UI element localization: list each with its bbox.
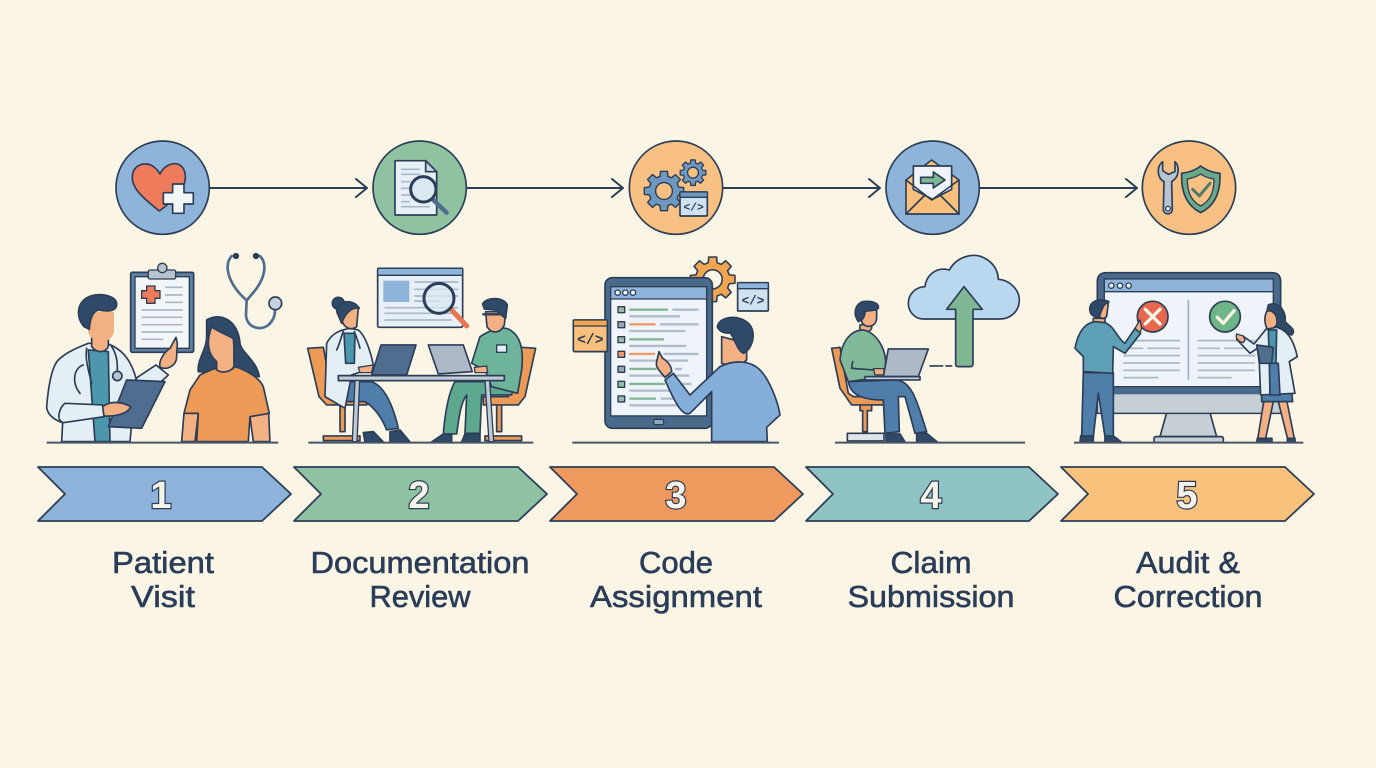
label: Patient Visit: Patient (112, 545, 214, 580)
icon: wrench and shield (1142, 141, 1236, 234)
icon: gears and code window: </> (683, 202, 704, 214)
arrow: step 4 to step 5 (979, 179, 1137, 197)
seated person (832, 301, 937, 442)
chevron 2: 2 (408, 475, 430, 517)
chevron 3: 3 (665, 475, 687, 517)
patient (182, 317, 270, 442)
label: Audit & Correction: Correction (1114, 579, 1262, 614)
chevron 2 (294, 467, 547, 521)
label: Code Assignment: Assignment (590, 579, 762, 614)
cloud (908, 255, 1019, 319)
illustration: two reviewers at a table (308, 268, 536, 443)
label: Documentation Review: Review (370, 579, 471, 614)
chevron 4 (806, 467, 1058, 521)
monitor (1097, 273, 1281, 443)
woman auditor (1236, 304, 1297, 442)
label: Code Assignment: Code (639, 545, 713, 580)
chevron 1: 1 (150, 475, 172, 517)
ground line (308, 440, 533, 446)
label: Documentation Review: Documentation (310, 545, 530, 580)
coder (656, 317, 780, 442)
panel: step 3 code assignment (550, 141, 803, 614)
panel: step 2 documentation review (294, 141, 547, 614)
ground line (1074, 440, 1303, 446)
chevron 5: 5 (1176, 475, 1198, 517)
stethoscope (228, 254, 282, 328)
code window right: </> (742, 294, 764, 309)
left chair (308, 347, 367, 441)
table (338, 376, 504, 442)
tablet (605, 278, 712, 428)
label: Code Assignment (590, 545, 762, 614)
panel: step 5 audit and correction (1061, 141, 1314, 614)
label: Claim Submission: Submission (848, 579, 1014, 614)
code window right (738, 283, 768, 311)
ground line (47, 440, 278, 446)
panel: step 4 claim submission (806, 141, 1058, 614)
illustration: doctor and patient (47, 254, 282, 443)
man auditor (1075, 300, 1142, 442)
man reviewer (432, 299, 522, 442)
illustration: auditing a monitor (1074, 273, 1303, 443)
label: Claim Submission: Claim (890, 545, 972, 580)
label: Patient Visit: Visit (131, 579, 195, 614)
illustration: person uploading to cloud (832, 255, 1025, 443)
ground line (572, 440, 779, 446)
woman reviewer (325, 297, 410, 442)
code window left (573, 320, 607, 352)
laptops (372, 345, 416, 375)
right chair (483, 347, 536, 441)
arrow: step 3 to step 4 (723, 179, 880, 197)
code window left: </> (577, 333, 604, 349)
clipboard with chart (131, 263, 194, 352)
icon: heart and plus (116, 141, 209, 234)
chevron 1 (38, 467, 291, 521)
label: Claim Submission (848, 545, 1014, 614)
label: Audit & Correction: Audit & (1136, 545, 1240, 580)
label: Audit & Correction (1114, 545, 1262, 614)
label: Patient Visit (112, 545, 214, 614)
upload arrow (930, 287, 982, 367)
red cross mark (1137, 301, 1168, 332)
illustration: coder using tablet (572, 257, 780, 443)
arrow: step 2 to step 3 (466, 179, 623, 197)
chevron 4: 4 (920, 475, 942, 517)
chevron 3 (550, 467, 803, 521)
arrow: step 1 to step 2 (209, 179, 367, 197)
green check mark (1210, 301, 1240, 332)
chevron 5 (1061, 467, 1314, 521)
doctor (47, 295, 177, 442)
icon: document and magnifier (373, 141, 466, 234)
icon: gears and code window (629, 141, 723, 234)
label: Documentation Review (310, 545, 530, 614)
ground line (835, 440, 1025, 446)
orange gear (690, 257, 735, 302)
panel: step 1 patient visit (38, 141, 291, 614)
icon: envelope with arrow (886, 141, 979, 234)
screen with magnifier (378, 268, 467, 327)
